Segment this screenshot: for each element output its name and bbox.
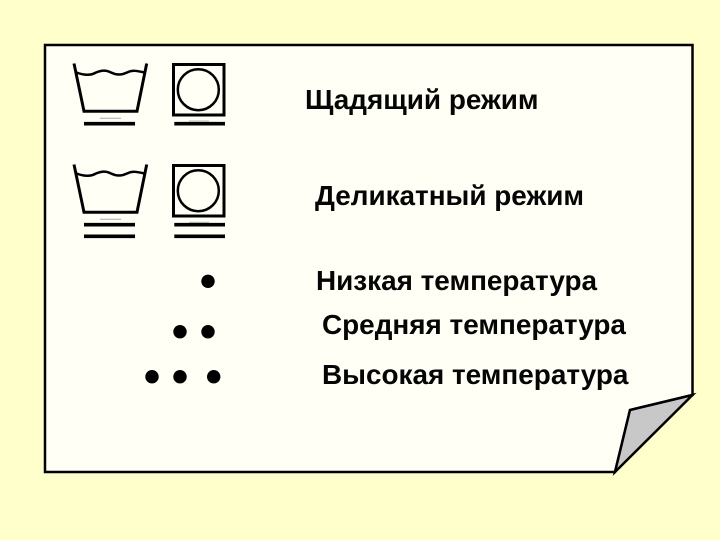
heading: gentle mode: Щадящий режим bbox=[305, 84, 539, 115]
icon: three dots bbox=[145, 370, 220, 383]
panel: paper sheet bbox=[45, 45, 692, 472]
label: low temperature: Низкая температура bbox=[316, 265, 598, 296]
icon: delicate dryer bbox=[174, 166, 225, 236]
icon: one dot bbox=[201, 275, 215, 288]
icon: delicate wash tub bbox=[74, 164, 147, 236]
icon: gentle dryer bbox=[174, 64, 225, 124]
label: high temperature: Высокая температура bbox=[322, 359, 629, 390]
label: medium temperature: Средняя температура bbox=[322, 309, 626, 340]
icon: gentle wash tub bbox=[74, 64, 147, 124]
icon: two dots bbox=[173, 325, 215, 338]
heading: delicate mode: Деликатный режим bbox=[315, 180, 584, 211]
icon: folded corner bbox=[615, 395, 692, 472]
